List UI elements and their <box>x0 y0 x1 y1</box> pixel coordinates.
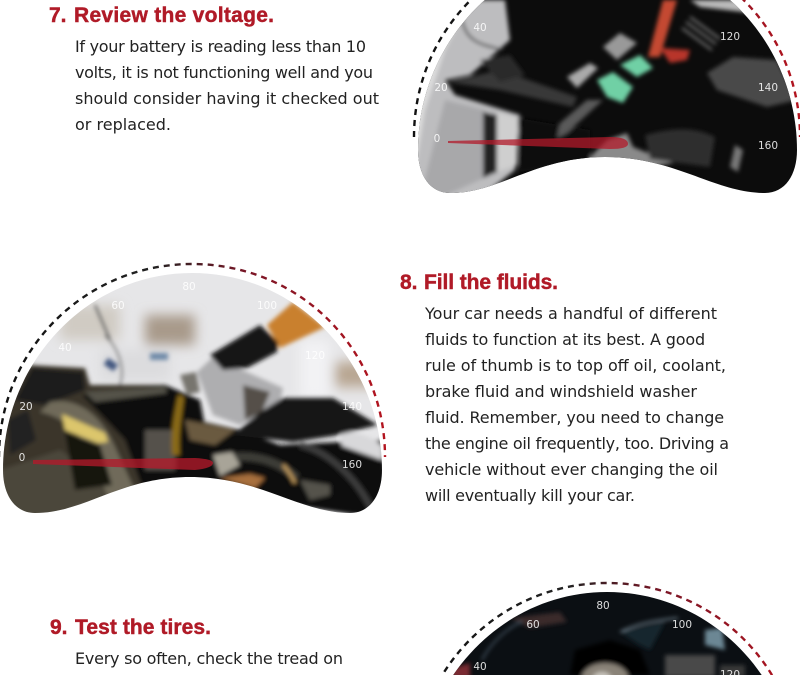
gauge numbers: 40 <box>58 342 72 354</box>
heading: step 8: Fill the fluids. <box>424 271 558 294</box>
battery photo <box>418 0 797 193</box>
text block: step 7 body: should consider having it checked out <box>75 89 379 108</box>
gauge numbers: 100 <box>257 300 277 312</box>
section 8: fill the fluids text <box>400 271 729 505</box>
text block: step 7 body: If your battery is reading less than 10 <box>75 37 366 56</box>
text block: step 8 body: brake fluid and windshield washer <box>425 382 697 401</box>
text block: step 9 body: Every so often, check the tread on <box>75 649 343 668</box>
gauge numbers: 40 <box>473 22 487 34</box>
gauge numbers: 160 <box>342 459 362 471</box>
gauge numbers: 20 <box>19 401 33 413</box>
dashed gauge arc <box>0 264 385 457</box>
gauge numbers: 0 <box>19 452 25 464</box>
gauge numbers: 120 <box>720 31 740 43</box>
gauge numbers: 80 <box>596 600 610 612</box>
heading: step 9: 9. <box>50 616 68 639</box>
gauge numbers: 40 <box>473 661 487 673</box>
text block: step 7 body: volts, it is not functioning well and you <box>75 63 373 82</box>
gauge numbers <box>473 600 740 675</box>
gauge numbers: 120 <box>305 350 325 362</box>
dashed gauge arc <box>414 0 800 137</box>
text block: step 8 body: will eventually kill your car. <box>425 486 635 505</box>
wheel photo <box>453 592 762 675</box>
gauge numbers: 140 <box>758 82 778 94</box>
gauge numbers: 160 <box>758 140 778 152</box>
gauge image: pouring engine oil <box>0 264 390 525</box>
gauge numbers: 80 <box>182 281 196 293</box>
text block: step 8 body: fluids to function at its best. A good <box>425 330 705 349</box>
text block: step 8 body: the engine oil frequently, too. Driving a <box>425 434 729 453</box>
gauge numbers: 20 <box>434 82 448 94</box>
text block: step 8 body: rule of thumb is to top off oil, coolant, <box>425 356 726 375</box>
text block: step 8 body: fluid. Remember, you need to change <box>425 408 724 427</box>
gauge numbers: 100 <box>672 619 692 631</box>
gauge numbers: 60 <box>526 619 540 631</box>
text block: step 8 body: vehicle without ever changing the oil <box>425 460 718 479</box>
heading: step 7: Review the voltage. <box>74 4 274 27</box>
text block: step 7 body: or replaced. <box>75 115 171 134</box>
oil pouring photo <box>3 273 382 513</box>
gauge numbers: 0 <box>434 133 440 145</box>
heading: step 9: Test the tires. <box>75 616 211 639</box>
needle <box>448 137 628 149</box>
section 7: review the voltage text <box>49 4 379 134</box>
gauge numbers: 60 <box>111 300 125 312</box>
section 9: test the tires text <box>50 616 343 668</box>
heading: step 8: 8. <box>400 271 418 294</box>
gauge image: car wheel <box>443 582 773 675</box>
needle <box>33 458 213 470</box>
dashed gauge arc <box>414 583 800 675</box>
heading: step 7: 7. <box>49 4 67 27</box>
text block: step 7 body <box>75 37 379 134</box>
text block: step 8 body <box>424 304 729 505</box>
gauge numbers <box>19 281 362 471</box>
gauge numbers <box>434 22 778 152</box>
gauge image: battery with jumper clamps <box>412 0 800 193</box>
gauge numbers: 140 <box>342 401 362 413</box>
text block: step 8 body: Your car needs a handful of different <box>424 304 717 323</box>
